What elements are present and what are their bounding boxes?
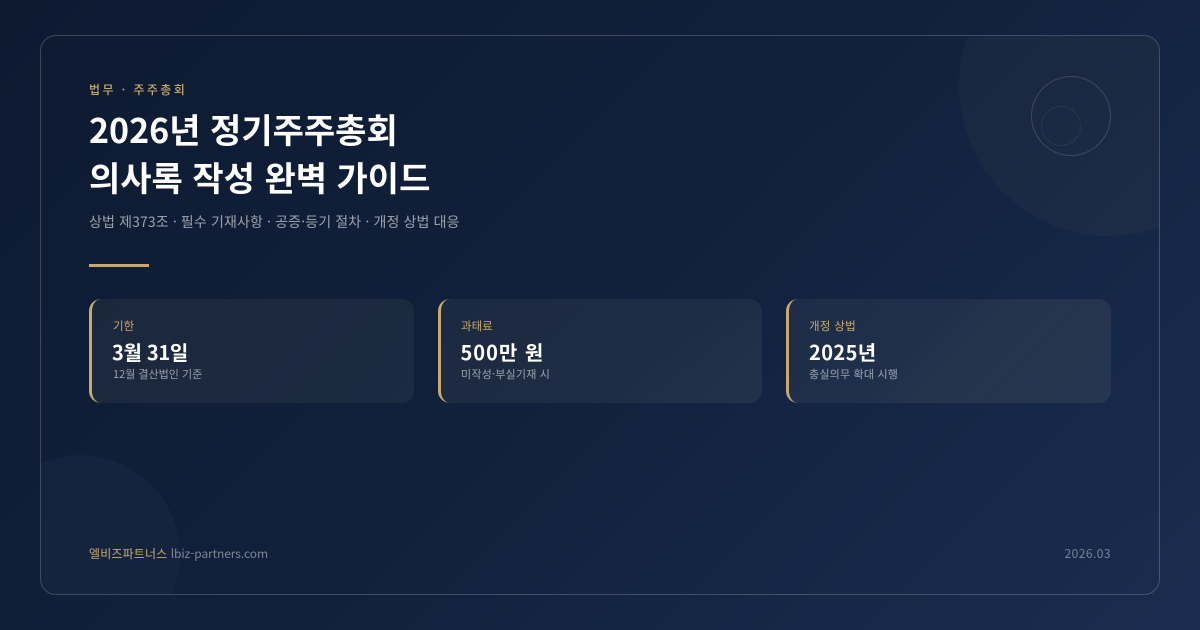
card value: 500만 원 <box>460 337 544 366</box>
card note: 12월 결산법인 기준 <box>113 366 202 382</box>
gold dot shading <box>441 299 762 403</box>
title: 의사록 작성 완벽 가이드 <box>89 152 430 201</box>
card label: 개정 상법 <box>809 318 856 334</box>
card: deadline <box>89 299 414 403</box>
accent rule <box>89 264 149 267</box>
title <box>89 104 430 201</box>
card label: 과태료 <box>461 318 493 334</box>
card: penalty <box>438 299 762 403</box>
card: amended law <box>786 299 1111 403</box>
title: 2026년 정기주주총회 <box>89 104 398 153</box>
card value: 2025년 <box>809 337 877 366</box>
gold dot shading <box>789 299 1111 403</box>
footer date: 2026.03 <box>1065 545 1111 562</box>
decorative circle: top right <box>959 0 1200 236</box>
card note: 충실의무 확대 시행 <box>809 366 898 382</box>
decorative ring: small dashed <box>1041 106 1081 146</box>
eyebrow label: 법무 · 주주총회 <box>89 81 187 98</box>
card label: 기한 <box>113 318 134 334</box>
footer brand: 엘비즈파트너스 lbiz-partners.com <box>89 545 268 562</box>
card note: 미작성·부실기재 시 <box>461 366 550 382</box>
subtitle: 상법 제373조 · 필수 기재사항 · 공증·등기 절차 · 개정 상법 대응 <box>89 212 460 232</box>
card value: 3월 31일 <box>112 337 188 366</box>
decorative ring: large <box>1031 76 1111 156</box>
decorative circle: bottom left <box>0 455 180 630</box>
